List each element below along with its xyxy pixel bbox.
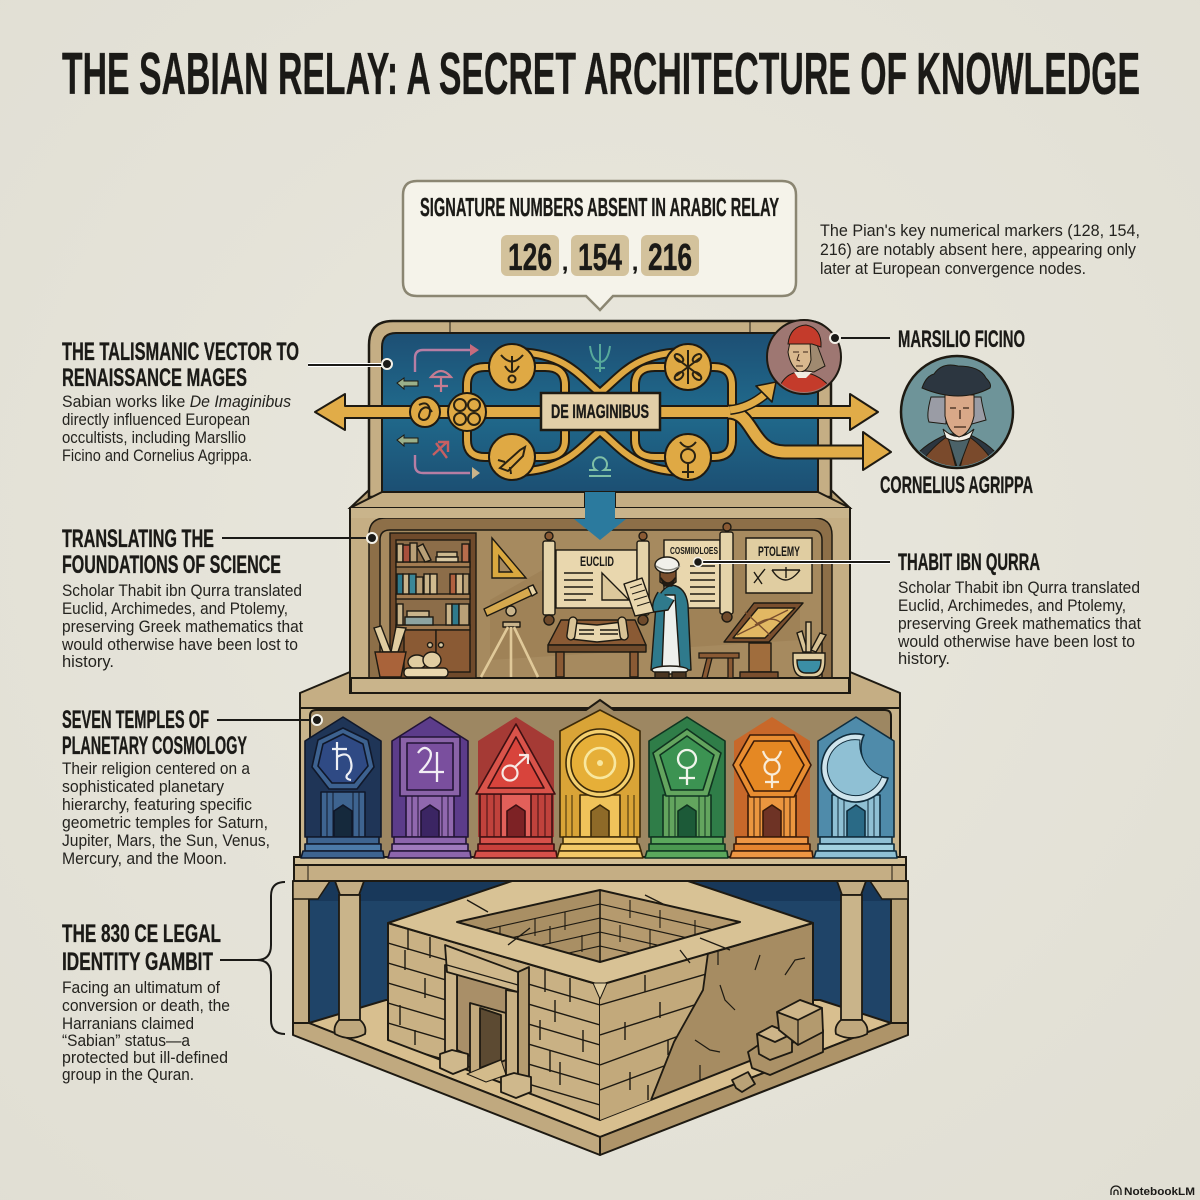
blue back wall: [309, 881, 891, 1026]
gold tubes: [467, 352, 732, 472]
leader: talismanic: [308, 359, 392, 369]
temple: Saturn: [301, 717, 384, 858]
telescope: [481, 585, 538, 677]
stone brackets: [293, 881, 330, 899]
text block: talismanic vector: Sabian works like De Imaginibus: [62, 392, 291, 411]
leader: Marsilio Ficino: [830, 333, 890, 343]
small pink and green arrows: [415, 350, 470, 473]
callout: signature numbers: [403, 181, 796, 310]
temple: Moon: [814, 717, 897, 858]
text block: translating science: preserving Greek mathematics that: [62, 617, 303, 636]
flow diagram: [315, 344, 891, 480]
glyphs: [431, 371, 451, 392]
text block: talismanic vector: directly influenced European: [62, 410, 250, 429]
nodes: [410, 344, 711, 480]
text block: legal gambit: IDENTITY GAMBIT: [62, 948, 213, 976]
pot right: [793, 622, 826, 677]
text block: seven temples: sophisticated planetary: [62, 777, 224, 796]
text block: legal gambit: protected but ill-defined: [62, 1048, 228, 1067]
text block: talismanic vector: [62, 338, 299, 465]
bookshelf: [390, 533, 476, 678]
text block: seven temples: Jupiter, Mars, the Sun, Venus,: [62, 831, 270, 850]
text block: seven temples: hierarchy, featuring specific: [62, 795, 252, 814]
leader: translating: [222, 533, 377, 543]
callout: signature numbers: ,: [562, 250, 568, 275]
text: numerical markers note: [820, 221, 1140, 278]
stone block temple: [388, 881, 813, 1120]
arrow: descending blue: [574, 492, 626, 540]
portrait: Cornelius Agrippa: [901, 356, 1013, 470]
callout: signature numbers: 154: [578, 237, 622, 279]
column right: [836, 881, 867, 1038]
libra glyph: [589, 457, 611, 476]
text block: talismanic vector: Ficino and Cornelius Agrippa.: [62, 446, 252, 465]
scroll: Euclid: EUCLID: [580, 553, 614, 569]
label: Marsilio Ficino: MARSILIO FICINO: [898, 326, 1025, 353]
portal and door: [440, 945, 531, 1098]
text block: translating science: history.: [62, 652, 114, 671]
text block: talismanic vector: RENAISSANCE MAGES: [62, 364, 247, 392]
drafting table: [724, 603, 803, 678]
callout: signature numbers: 126: [508, 237, 552, 279]
text block: translating science: would otherwise have been lost to: [61, 635, 298, 654]
tier: temples shelf: [294, 672, 906, 881]
temple: Sun: [557, 710, 643, 858]
text block: translating science: TRANSLATING THE: [62, 525, 214, 553]
rubble steps: [732, 1000, 823, 1092]
poster: Ptolemy: [746, 538, 812, 593]
text: numerical markers note: 216) are notably absent here, appearing only: [820, 240, 1136, 259]
logo: NotebookLM: NotebookLM: [1124, 1186, 1195, 1198]
text block: translating science: Scholar Thabit ibn Qurra translated: [62, 581, 302, 600]
portrait: Marsilio Ficino: [767, 320, 841, 400]
temple: Jupiter: [388, 717, 471, 858]
pot left and scrolls: [374, 626, 448, 677]
neptune glyph: [590, 344, 610, 372]
text block: Thabit ibn Qurra: [897, 549, 1141, 668]
text block: seven temples: [62, 706, 270, 868]
text: numerical markers note: later at European convergence nodes.: [820, 259, 1086, 278]
text block: legal gambit: conversion or death, the: [62, 996, 230, 1015]
text block: talismanic vector: THE TALISMANIC VECTOR TO: [62, 338, 299, 366]
text block: seven temples: geometric temples for Saturn,: [62, 813, 268, 832]
temple: Mars: [474, 717, 557, 858]
text block: translating science: [61, 525, 303, 671]
text block: seven temples: SEVEN TEMPLES OF: [62, 706, 209, 734]
bracket: gambit leader: [220, 882, 285, 1034]
floor and rim: [293, 881, 908, 1155]
text block: talismanic vector: occultists, including Marsllio: [62, 428, 246, 447]
leader: Thabit: [694, 558, 890, 566]
scholar figure: [624, 557, 691, 678]
leader: seven temples: [217, 715, 322, 725]
tier: foundation with stone temple: [293, 881, 908, 1155]
text block: Thabit ibn Qurra: history.: [898, 649, 950, 668]
tier: library: [350, 508, 850, 693]
text block: Thabit ibn Qurra: Euclid, Archimedes, and Ptolemy,: [898, 596, 1126, 615]
tier: top diagram chamber: [350, 321, 850, 518]
column left: [334, 881, 365, 1038]
temple: Mercury: [730, 717, 813, 858]
text: numerical markers note: The Pian's key numerical markers (128, 154,: [820, 221, 1140, 240]
branch to Agrippa: [728, 412, 891, 470]
callout: signature numbers: 216: [648, 237, 692, 279]
box: De Imaginibus: DE IMAGINIBUS: [551, 402, 649, 423]
main horizontal arrow: [315, 394, 878, 430]
text block: Thabit ibn Qurra: Scholar Thabit ibn Qurra translated: [898, 578, 1140, 597]
scroll: Cosmoloes: [664, 523, 733, 622]
text block: translating science: FOUNDATIONS OF SCIENCE: [62, 551, 281, 579]
text block: legal gambit: group in the Quran.: [62, 1065, 194, 1084]
text block: legal gambit: [62, 920, 230, 1084]
scroll: Cosmoloes: COSMIIOLOES: [670, 546, 718, 557]
node glyphs: [419, 350, 703, 478]
text block: seven temples: Their religion centered on a: [62, 759, 250, 778]
stool: [699, 653, 739, 678]
text block: Thabit ibn Qurra: would otherwise have been lost to: [897, 632, 1135, 651]
scroll: Euclid: [543, 532, 649, 625]
text block: seven temples: Mercury, and the Moon.: [62, 849, 227, 868]
poster: Ptolemy: PTOLEMY: [758, 543, 800, 559]
text block: legal gambit: Facing an ultimatum of: [62, 978, 220, 997]
text block: legal gambit: THE 830 CE LEGAL: [62, 920, 221, 948]
text block: translating science: Euclid, Archimedes, and Ptolemy,: [62, 599, 288, 618]
text block: seven temples: PLANETARY COSMOLOGY: [62, 732, 247, 760]
text block: Thabit ibn Qurra: preserving Greek mathematics that: [898, 614, 1141, 633]
text block: legal gambit: “Sabian” status—a: [62, 1031, 190, 1050]
table with book: [548, 617, 646, 677]
label: Cornelius Agrippa: CORNELIUS AGRIPPA: [880, 472, 1033, 499]
set square: [492, 538, 526, 578]
brick courses: [388, 928, 600, 1105]
callout: signature numbers: SIGNATURE NUMBERS ABSENT IN ARABIC RELAY: [420, 192, 779, 222]
branch to Ficino: [730, 382, 776, 410]
temple: Venus: [645, 717, 728, 858]
text block: Thabit ibn Qurra: THABIT IBN QURRA: [898, 549, 1040, 576]
text block: legal gambit: Harranians claimed: [62, 1014, 194, 1033]
callout: signature numbers: ,: [632, 250, 638, 275]
box: De Imaginibus: [541, 393, 660, 430]
